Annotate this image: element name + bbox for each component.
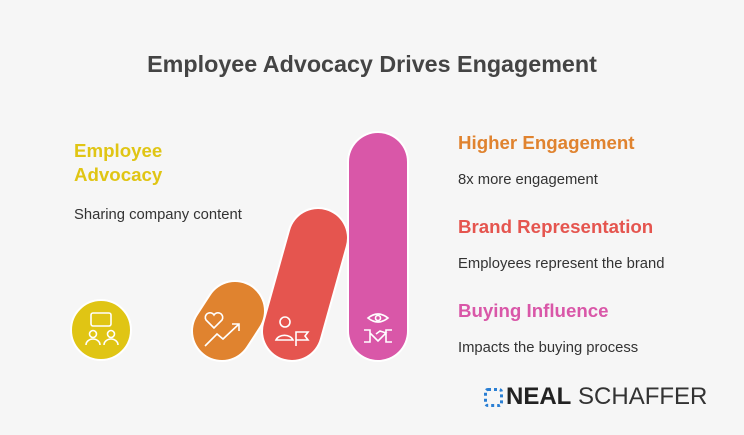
heading: buying influence: Buying Influence [458,300,609,321]
heading: higher engagement: Higher Engagement [458,132,635,153]
subtext: engagement: 8x more engagement [458,172,598,188]
subtext: brand: Employees represent the brand [458,256,664,272]
left heading: Employee [74,140,162,161]
left heading: Advocacy [74,164,162,185]
left subtext: Sharing company content [74,207,242,223]
left heading [74,140,162,185]
title: Employee Advocacy Drives Engagement [147,51,597,77]
subtext: buying: Impacts the buying process [458,340,638,356]
bar: orange [205,311,239,346]
heading: brand representation: Brand Representation [458,216,653,237]
icon: yellow circle people [71,300,131,360]
bar: red [276,238,318,346]
bar: pink [347,131,409,362]
logo: NEAL SCHAFFER [506,383,707,410]
icon: logo mark [484,388,503,407]
